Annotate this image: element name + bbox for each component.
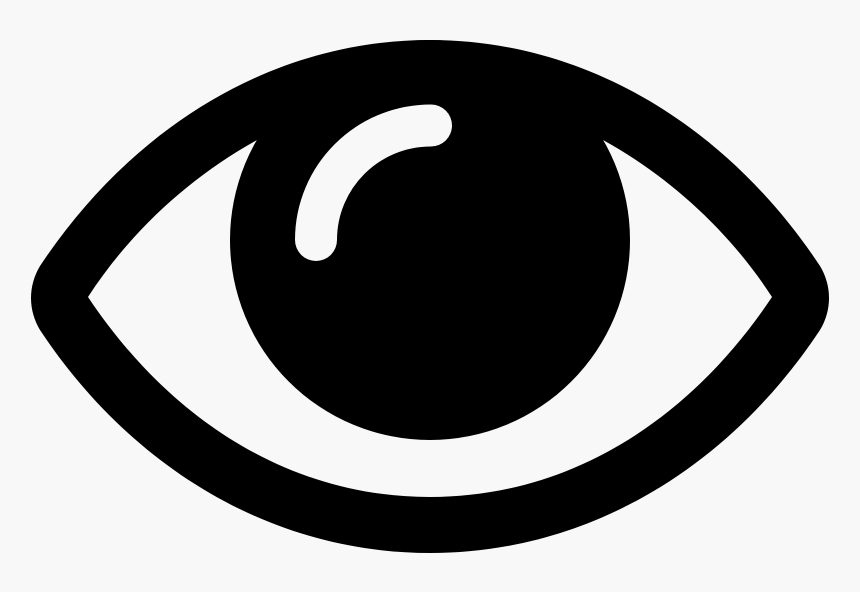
pupil highlight — [316, 126, 431, 240]
pupil — [230, 40, 630, 440]
